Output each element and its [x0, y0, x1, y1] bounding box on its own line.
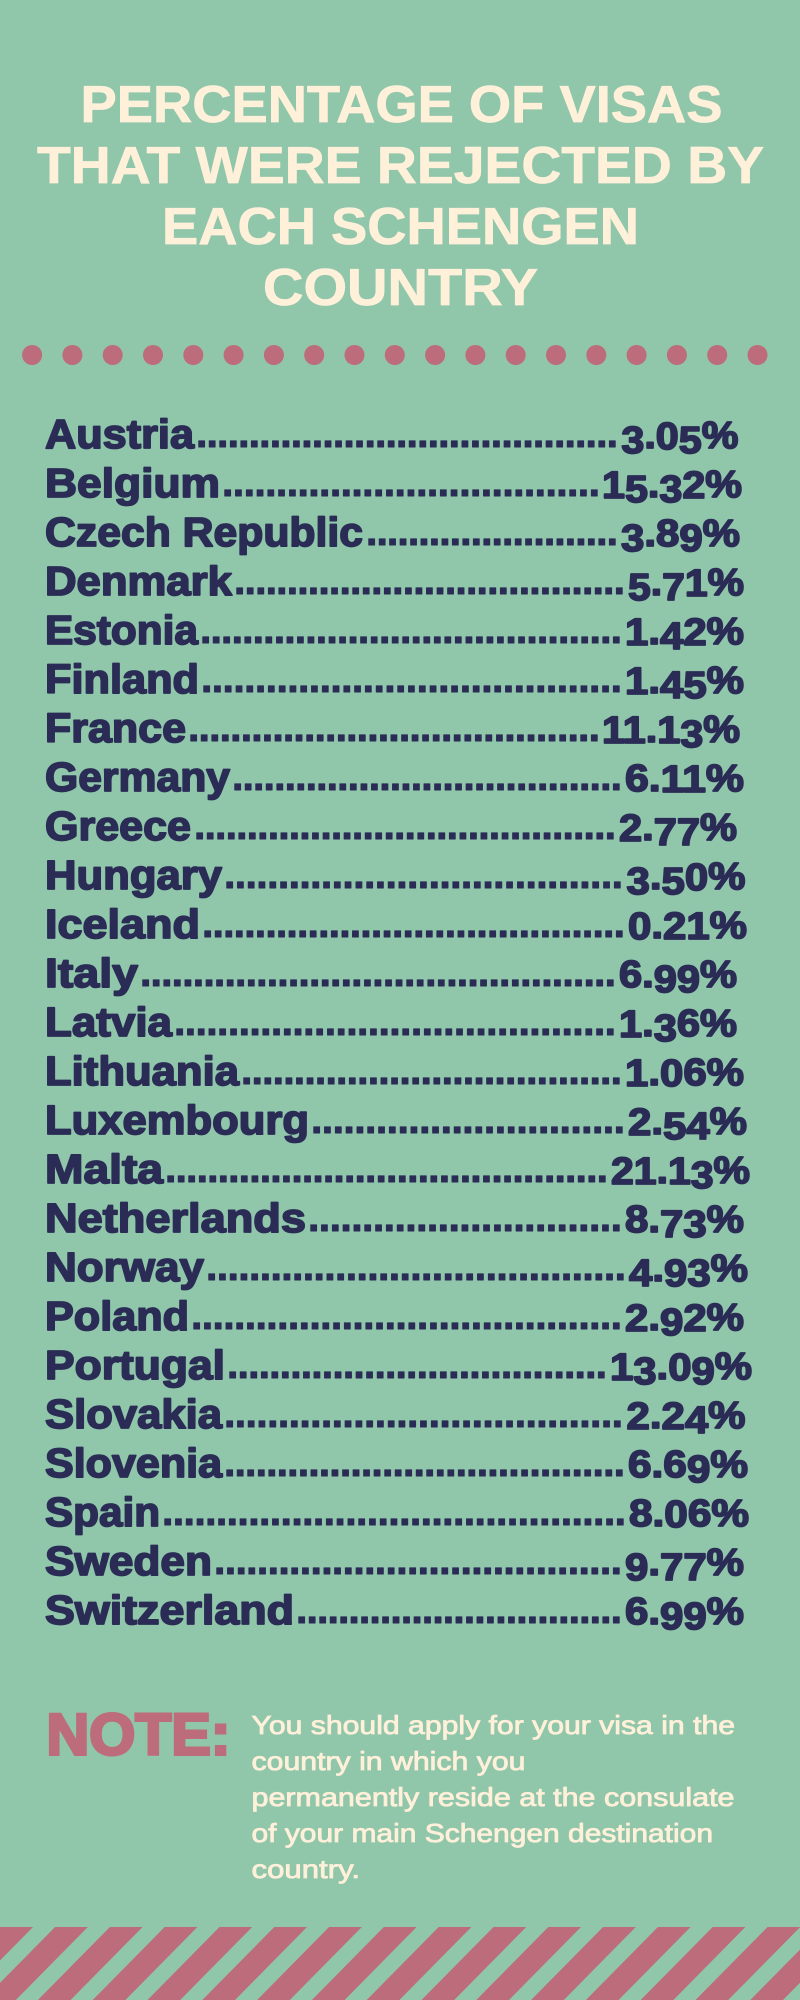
- row: Greece: [45, 802, 737, 854]
- row: Greece: 2.77%: [619, 807, 737, 854]
- row: Estonia: ........................................: [200, 606, 622, 652]
- row: Malta: 21.13%: [611, 1150, 750, 1197]
- row: Italy: [45, 949, 737, 1001]
- row: Iceland: 0.21%: [628, 905, 747, 948]
- row: Germany: Germany: [45, 754, 230, 800]
- row: Norway: [45, 1243, 748, 1295]
- row: Hungary: [45, 851, 746, 903]
- note text: of your main Schengen destination: [252, 1818, 713, 1848]
- title: THAT WERE REJECTED BY: [37, 137, 764, 195]
- note label: NOTE:: [46, 1702, 230, 1768]
- row: Italy: 6.99%: [619, 954, 737, 1001]
- row: Switzerland: Switzerland: [45, 1587, 294, 1633]
- row: Czech Republic: Czech Republic: [45, 509, 363, 555]
- row: Finland: Finland: [45, 656, 199, 702]
- row: Luxembourg: Luxembourg: [45, 1097, 309, 1143]
- country list: [45, 410, 752, 1638]
- dotted divider: [22, 345, 768, 365]
- row: Latvia: Latvia: [45, 999, 173, 1045]
- row: Slovenia: [45, 1439, 748, 1491]
- note text: permanently reside at the consulate: [252, 1782, 734, 1812]
- row: Netherlands: Netherlands: [45, 1195, 306, 1241]
- title: COUNTRY: [263, 259, 538, 317]
- row: Malta: ..........................................: [165, 1145, 608, 1191]
- row: Belgium: [45, 459, 742, 511]
- row: Czech Republic: ........................: [366, 508, 618, 554]
- row: Belgium: ...................................: [222, 459, 600, 505]
- row: Iceland: [45, 900, 747, 948]
- row: France: France: [45, 705, 186, 751]
- row: Malta: [45, 1145, 750, 1197]
- note text: You should apply for your visa in the: [252, 1710, 735, 1740]
- title: [37, 76, 764, 317]
- row: Hungary: .....................................: [224, 851, 623, 897]
- row: Belgium: Belgium: [45, 460, 220, 506]
- row: Slovakia: Slovakia: [45, 1391, 223, 1437]
- row: Slovakia: [45, 1390, 746, 1442]
- note text: [252, 1710, 735, 1884]
- row: Hungary: 3.50%: [626, 856, 746, 903]
- row: Hungary: Hungary: [45, 852, 222, 898]
- row: Poland: 2.92%: [625, 1297, 744, 1344]
- row: France: 11.13%: [602, 709, 740, 756]
- row: Germany: 6.11%: [625, 758, 744, 801]
- row: Greece: ........................................: [194, 802, 616, 848]
- row: Sweden: [45, 1537, 744, 1589]
- row: Denmark: [45, 557, 744, 609]
- row: Austria: Austria: [45, 411, 195, 457]
- row: Czech Republic: [45, 508, 740, 560]
- row: France: [45, 704, 740, 756]
- row: Denmark: Denmark: [45, 558, 232, 604]
- row: Spain: 8.06%: [629, 1493, 749, 1536]
- row: Switzerland: ...............................: [296, 1586, 622, 1632]
- row: Luxembourg: 2.54%: [628, 1101, 747, 1148]
- row: Finland: [45, 655, 744, 707]
- row: Sweden: 9.77%: [625, 1542, 744, 1589]
- row: Slovenia: 6.69%: [628, 1444, 748, 1491]
- title: PERCENTAGE OF VISAS: [80, 76, 722, 134]
- row: Sweden: Sweden: [45, 1538, 212, 1584]
- row: Finland: .......................................: [201, 655, 622, 701]
- row: Norway: Norway: [45, 1244, 204, 1290]
- note text: country.: [252, 1854, 360, 1884]
- row: Slovenia: ......................................: [224, 1439, 625, 1485]
- row: Iceland: ........................................: [202, 900, 625, 946]
- title: EACH SCHENGEN: [162, 198, 639, 256]
- row: Spain: Spain: [45, 1489, 160, 1535]
- row: Luxembourg: .............................: [311, 1096, 625, 1142]
- row: Denmark: .....................................: [234, 557, 625, 603]
- row: Switzerland: 6.99%: [625, 1591, 744, 1638]
- row: Poland: Poland: [45, 1293, 189, 1339]
- row: Finland: 1.45%: [625, 660, 744, 707]
- row: France: .......................................: [188, 704, 600, 750]
- row: Slovakia: .....................................: [224, 1390, 623, 1436]
- row: Italy: Italy: [45, 950, 138, 996]
- row: Germany: [45, 753, 744, 801]
- row: Malta: Malta: [45, 1146, 164, 1192]
- row: Norway: .......................................: [206, 1243, 626, 1289]
- row: Spain: [45, 1488, 749, 1536]
- row: Portugal: ....................................: [227, 1341, 607, 1387]
- row: Lithuania: ....................................: [241, 1047, 622, 1093]
- row: Spain: ...........................................: [162, 1488, 626, 1534]
- row: Portugal: Portugal: [45, 1342, 225, 1388]
- row: Estonia: Estonia: [45, 607, 199, 653]
- row: Greece: Greece: [45, 803, 191, 849]
- row: Belgium: 15.32%: [602, 464, 742, 511]
- row: Lithuania: [45, 1047, 744, 1095]
- note text: country in which you: [252, 1746, 526, 1776]
- row: Slovakia: 2.24%: [626, 1395, 746, 1442]
- row: Poland: ........................................: [191, 1292, 622, 1338]
- row: Austria: [45, 410, 738, 462]
- row: Estonia: 1.42%: [625, 611, 744, 658]
- row: Latvia: 1.36%: [619, 1003, 737, 1050]
- row: Estonia: [45, 606, 744, 658]
- row: Lithuania: 1.06%: [625, 1052, 744, 1095]
- row: Germany: .....................................: [232, 753, 622, 799]
- row: Denmark: 5.71%: [628, 562, 744, 609]
- row: Czech Republic: 3.89%: [621, 513, 740, 560]
- row: Lithuania: Lithuania: [45, 1048, 240, 1094]
- row: Latvia: [45, 998, 737, 1050]
- row: Sweden: ......................................: [214, 1537, 622, 1583]
- row: Poland: [45, 1292, 744, 1344]
- row: Slovenia: Slovenia: [45, 1440, 223, 1486]
- striped footer band: [0, 1927, 800, 2000]
- row: Switzerland: [45, 1586, 744, 1638]
- row: Netherlands: 8.73%: [625, 1199, 744, 1246]
- row: Luxembourg: [45, 1096, 747, 1148]
- row: Italy: .............................................: [140, 949, 616, 995]
- row: Netherlands: [45, 1194, 744, 1246]
- row: Portugal: [45, 1341, 752, 1393]
- row: Austria: 3.05%: [621, 415, 738, 462]
- row: Latvia: .........................................: [174, 998, 616, 1044]
- row: Netherlands: .............................: [308, 1194, 622, 1240]
- row: Portugal: 13.09%: [610, 1346, 752, 1393]
- row: Iceland: Iceland: [45, 901, 200, 947]
- row: Norway: 4.93%: [629, 1248, 748, 1295]
- row: Austria: ........................................: [196, 410, 618, 456]
